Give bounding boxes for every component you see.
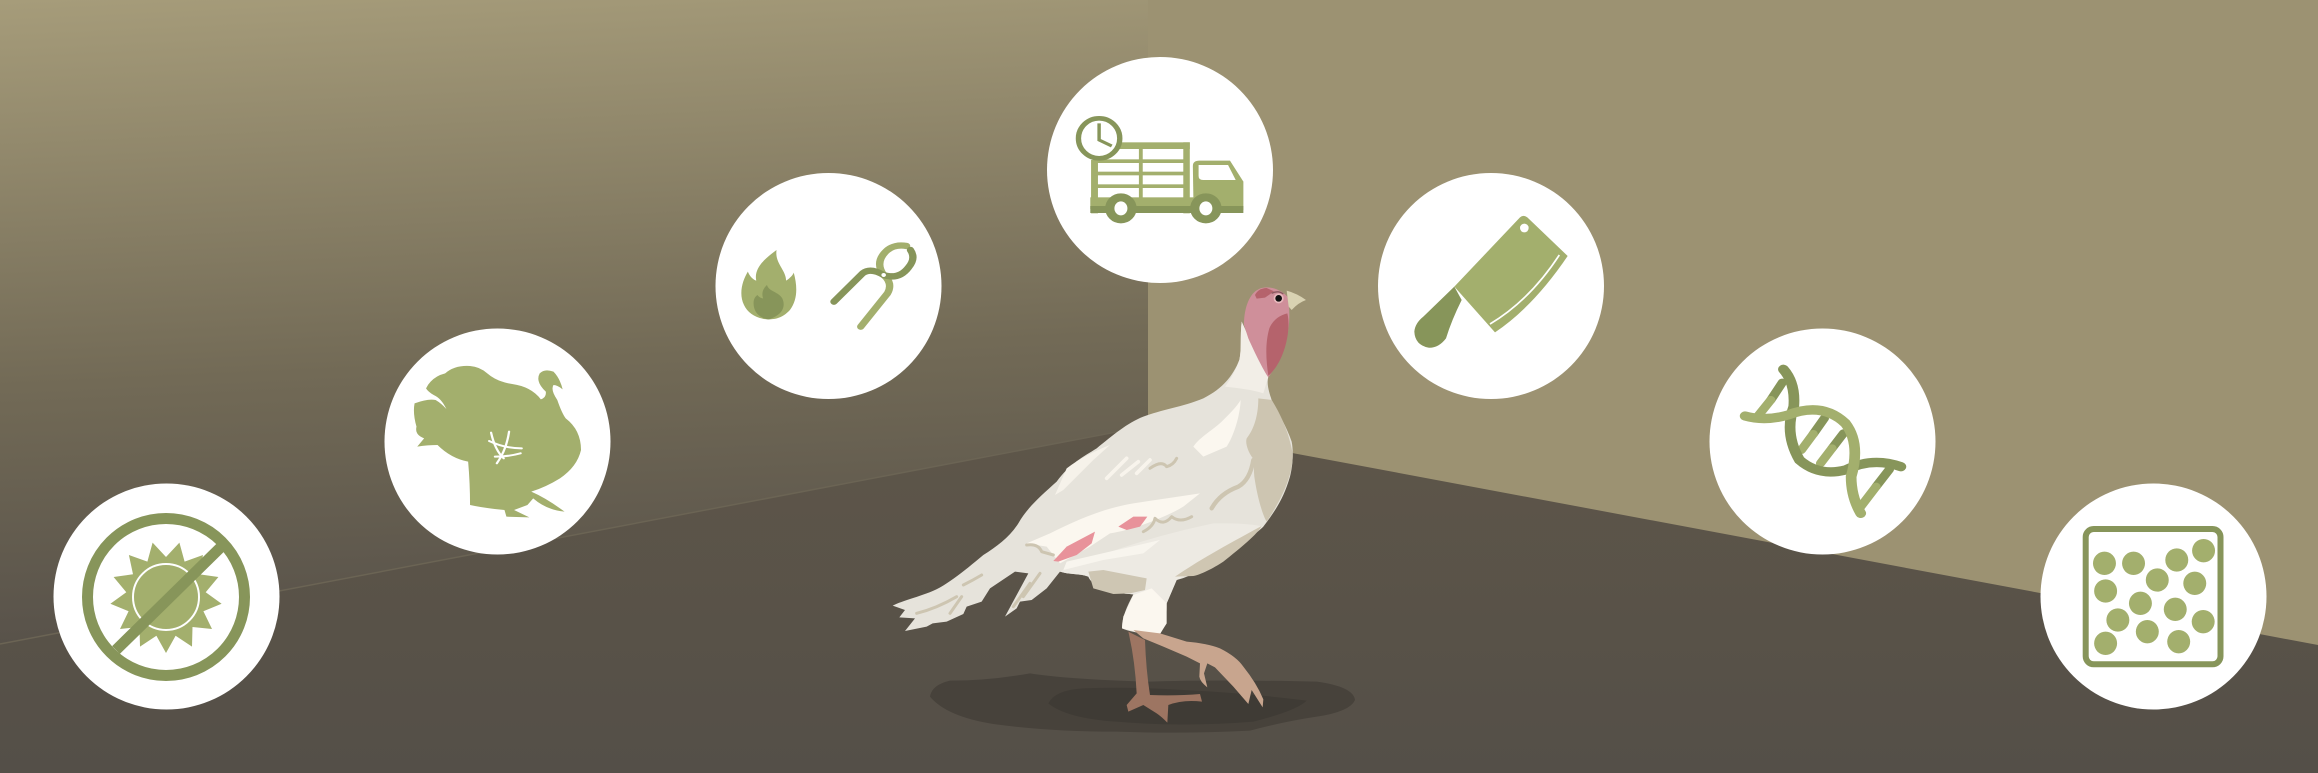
icon: sun — [110, 543, 222, 653]
forehead — [1255, 288, 1274, 299]
breast shading — [1246, 398, 1293, 522]
icon circle 6: genetics — [1710, 328, 1936, 554]
icon: crowded pen frame — [2086, 529, 2220, 664]
wing highlight — [1027, 493, 1200, 563]
turkey illustration — [893, 287, 1306, 723]
shoulder highlight — [1193, 400, 1241, 457]
eye — [1272, 292, 1284, 303]
standing leg — [1127, 632, 1202, 723]
lifted leg — [1133, 630, 1263, 707]
icon circle 3: heat and pliers — [716, 173, 942, 399]
head and neck skin — [1244, 287, 1289, 377]
feather marks — [917, 458, 1253, 613]
belly shading — [1175, 526, 1262, 577]
icon: scratch marks — [489, 432, 522, 463]
pink wound marks — [1053, 532, 1095, 562]
icon circle 7: stocking density — [2040, 484, 2266, 710]
lower body lighter plumage — [1060, 523, 1263, 603]
wattle — [1266, 313, 1289, 376]
background: floor — [0, 426, 2318, 773]
neck highlight — [1225, 322, 1268, 393]
icon: cleaver — [1414, 216, 1568, 348]
icon: flame — [741, 250, 796, 319]
icon circle 4: transport time — [1047, 57, 1273, 283]
background: right wall — [1148, 0, 2318, 660]
under-wing feathers — [1088, 570, 1147, 594]
wing highlight feathers — [1107, 458, 1150, 478]
beak — [1287, 291, 1306, 310]
icon circle 1: no sunlight — [54, 484, 280, 710]
turkey floor shadow — [930, 673, 1355, 733]
icon: truck — [1090, 142, 1243, 219]
icon: prohibition sign — [88, 518, 244, 676]
thigh — [1122, 588, 1167, 634]
icon: crowded dots — [2093, 539, 2215, 655]
icon: DNA helix — [1745, 369, 1901, 513]
icon circle 2: injured turkey — [384, 328, 610, 554]
body plumage — [893, 322, 1293, 634]
icon: clock — [1078, 118, 1120, 158]
icon: turkey silhouette — [414, 366, 581, 517]
background: left wall — [0, 0, 1148, 660]
icon circle 5: butchery — [1378, 173, 1604, 399]
icon: pliers — [834, 245, 913, 327]
